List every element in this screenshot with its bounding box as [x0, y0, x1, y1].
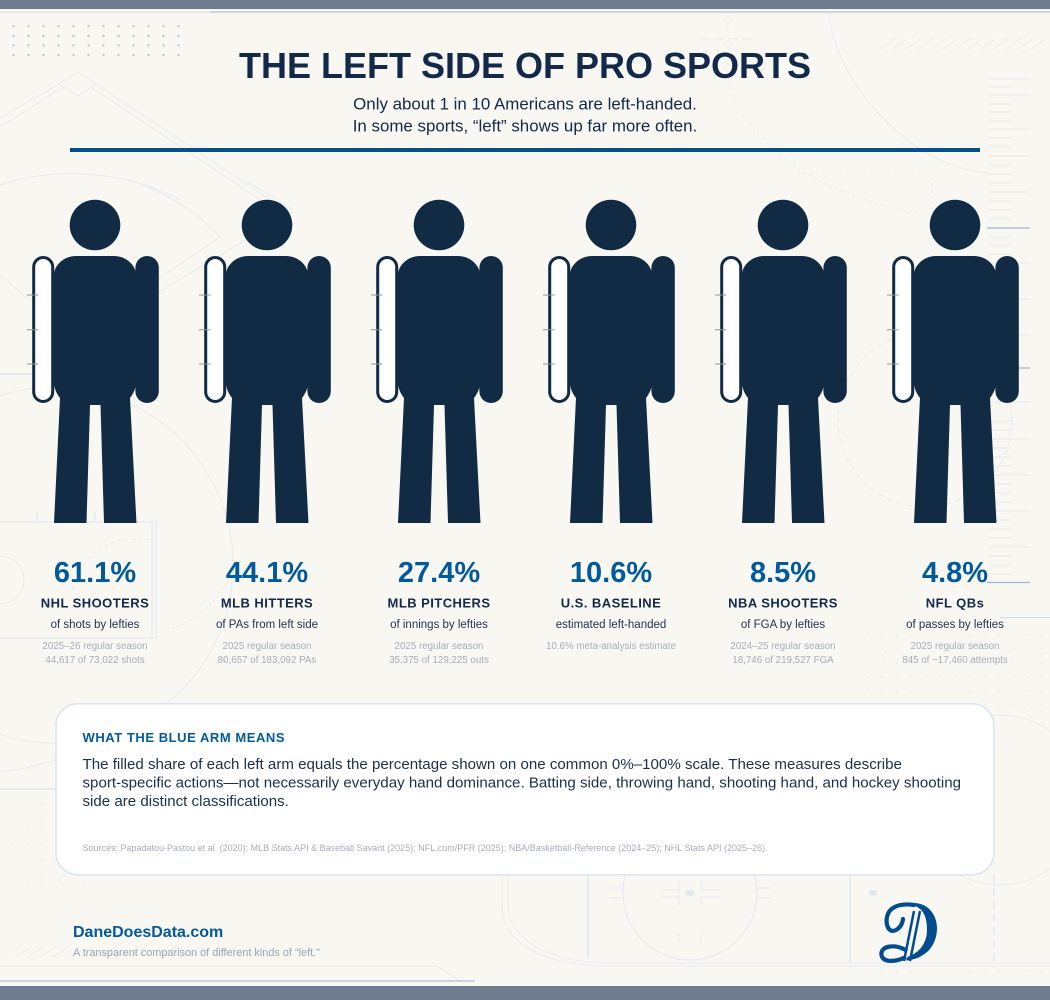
website name: DaneDoesData.com — [73, 924, 223, 941]
stat: U.S. baseline: U.S. BASELINE — [561, 596, 661, 610]
panel: what the blue arm means — [56, 704, 994, 875]
stat: NHL shooters: of shots by lefties — [51, 619, 140, 631]
body and legs — [226, 256, 308, 523]
panel heading: WHAT THE BLUE ARM MEANS — [82, 730, 285, 745]
stat: MLB hitters: 44.1% — [226, 557, 308, 589]
stat: NFL QBs: 2025 regular season — [911, 641, 999, 652]
stat: NFL QBs: NFL QBs — [926, 596, 984, 610]
tagline: A transparent comparison of different kinds of “left.” — [73, 947, 320, 959]
header rule — [70, 148, 980, 152]
panel body text: The filled share of each left arm equals the percentage shown on one common 0%–100% scale. These measures describe — [82, 756, 902, 773]
head — [242, 200, 292, 250]
stat: NBA shooters — [728, 557, 838, 666]
title: THE LEFT SIDE OF PRO SPORTS — [239, 45, 811, 86]
stat: U.S. baseline — [546, 557, 676, 652]
body and legs — [54, 256, 136, 523]
stat: MLB pitchers: 2025 regular season — [395, 641, 483, 652]
head — [758, 200, 808, 250]
stat: MLB hitters: of PAs from left side — [216, 619, 318, 631]
stat: MLB pitchers: of innings by lefties — [390, 619, 488, 631]
stat: NBA shooters: of FGA by lefties — [741, 619, 825, 631]
subtitle: In some sports, “left” shows up far more often. — [353, 116, 697, 136]
left arm gauge — [543, 258, 569, 402]
left arm gauge — [27, 258, 53, 402]
stat: NBA shooters: 18,746 of 219,527 FGA — [732, 655, 834, 666]
right arm — [307, 256, 331, 403]
right arm — [651, 256, 675, 403]
stat: NFL QBs: of passes by lefties — [906, 619, 1004, 631]
stat: NHL shooters: 61.1% — [54, 557, 136, 589]
stat: U.S. baseline: 10.6% meta-analysis estimate — [546, 641, 676, 652]
body and legs — [398, 256, 480, 523]
left arm gauge — [199, 258, 225, 402]
left arm gauge — [887, 258, 913, 402]
stat: MLB pitchers: 27.4% — [398, 557, 480, 589]
stat: U.S. baseline: estimated left-handed — [556, 619, 666, 631]
top band — [0, 0, 1050, 12]
figure: MLB hitters — [199, 200, 331, 523]
stat: NBA shooters: 2024–25 regular season — [730, 641, 836, 652]
head — [586, 200, 636, 250]
stat: NHL shooters: 2025–26 regular season — [42, 641, 148, 652]
stat: MLB pitchers: MLB PITCHERS — [388, 596, 490, 610]
stat: MLB hitters — [216, 557, 318, 666]
footer brand — [73, 924, 320, 959]
body and legs — [742, 256, 824, 523]
head — [414, 200, 464, 250]
body and legs — [570, 256, 652, 523]
panel body text — [82, 756, 961, 810]
right arm — [995, 256, 1019, 403]
stat: MLB hitters: 2025 regular season — [223, 641, 311, 652]
left arm gauge — [371, 258, 397, 402]
stat: NFL QBs: 845 of ~17,460 attempts — [902, 655, 1008, 666]
body and legs — [914, 256, 996, 523]
icon: script D logo — [881, 903, 937, 961]
figure: U.S. baseline — [543, 200, 675, 523]
figure: NFL QBs — [887, 200, 1019, 523]
stat: NBA shooters: 8.5% — [750, 557, 816, 589]
stat: MLB pitchers — [388, 557, 490, 666]
stat: NHL shooters: NHL SHOOTERS — [41, 596, 149, 610]
stat: MLB hitters: 80,657 of 183,092 PAs — [218, 655, 316, 666]
panel body text: sport-specific actions—not necessarily everyday hand dominance. Batting side, throwing hand, shooting hand, and hockey shooting — [82, 774, 961, 792]
stat: NBA shooters: NBA SHOOTERS — [728, 596, 838, 610]
stat: MLB pitchers: 35,375 of 129,225 outs — [389, 655, 489, 666]
right arm — [823, 256, 847, 403]
stat: NFL QBs — [902, 557, 1008, 666]
bottom band — [0, 986, 1050, 1000]
figure: MLB pitchers — [371, 200, 503, 523]
right arm — [479, 256, 503, 403]
head — [930, 200, 980, 250]
figure: NHL shooters — [27, 200, 159, 523]
figure: NBA shooters — [715, 200, 847, 523]
stat: NFL QBs: 4.8% — [922, 557, 988, 589]
stat: U.S. baseline: 10.6% — [570, 557, 652, 589]
sources: Sources: Papadatou-Pastou et al. (2020); MLB Stats API & Baseball Savant (2025); NFL.com/PFR (2025); NBA/Basketball-Reference (2024–25); NHL Stats API (2025–26). — [82, 843, 768, 853]
stat: NHL shooters — [41, 557, 149, 666]
subtitle — [353, 94, 697, 136]
panel card — [56, 704, 994, 875]
left arm gauge — [715, 258, 741, 402]
stat: NHL shooters: 44,617 of 73,022 shots — [45, 655, 145, 666]
panel body text: side are distinct classifications. — [82, 793, 289, 810]
subtitle: Only about 1 in 10 Americans are left-handed. — [353, 94, 697, 114]
stat: MLB hitters: MLB HITTERS — [221, 596, 313, 610]
head — [70, 200, 120, 250]
right arm — [135, 256, 159, 403]
